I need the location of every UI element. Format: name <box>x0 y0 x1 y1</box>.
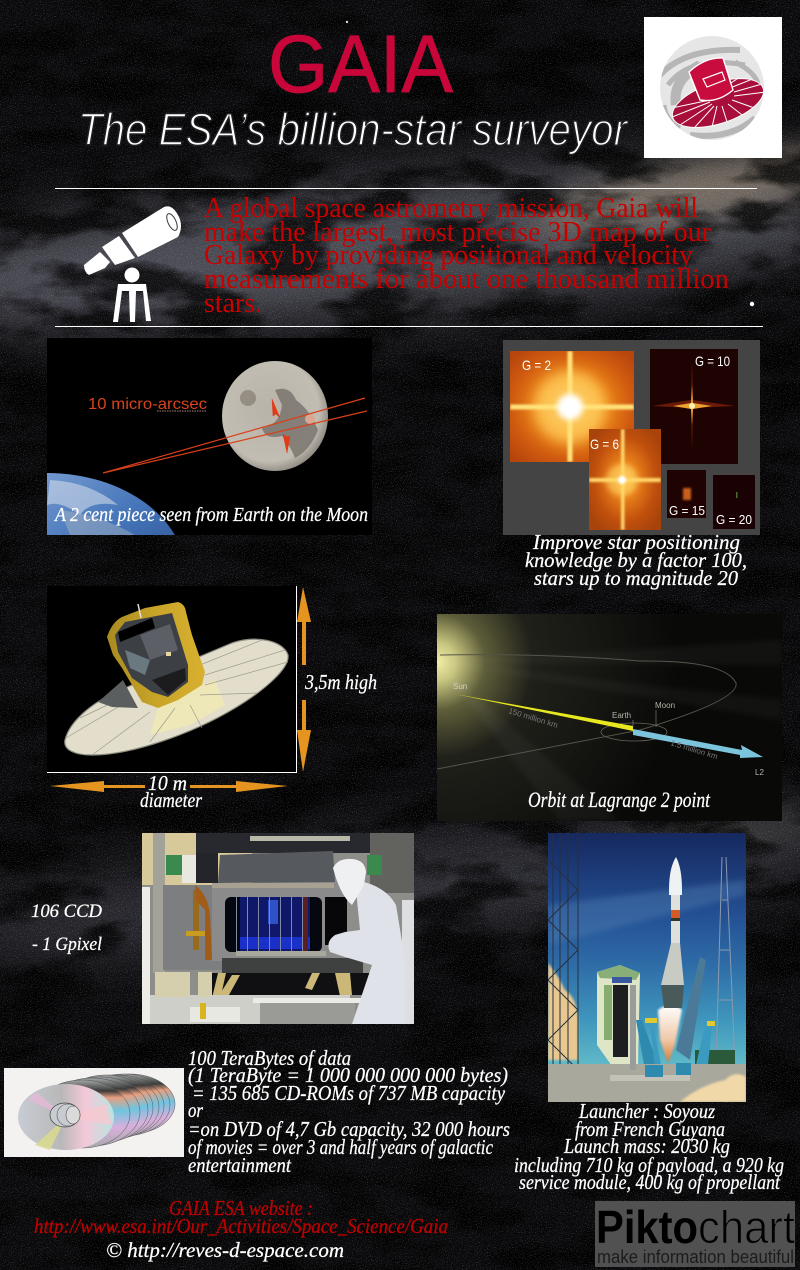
moon <box>222 361 328 471</box>
arrow: height <box>297 587 311 772</box>
G=6: G = 6 <box>590 436 619 452</box>
service tower <box>597 965 640 1066</box>
main plate <box>163 885 223 970</box>
text: data volume: (1 TeraByte = 1 000 000 000 000 bytes) <box>188 1063 508 1087</box>
text: data volume: =on DVD of 4,7 Gb capacity, 32 000 hours <box>188 1117 510 1141</box>
intro text: Galaxy by providing positional and velocity <box>204 239 693 271</box>
intro text <box>204 192 729 319</box>
ground <box>548 985 746 1102</box>
divider line top <box>55 188 757 189</box>
gold shell <box>107 602 205 708</box>
panel: lagrange orbit image <box>437 614 782 821</box>
footer: website links: © http://reves-d-espace.com <box>106 1238 344 1262</box>
panel: earth moon angle image <box>47 338 372 535</box>
G=15: G = 15 <box>669 503 705 518</box>
thermal cover <box>218 851 335 883</box>
trees <box>695 1050 735 1065</box>
arrow: diameter <box>50 781 288 792</box>
sunshield <box>65 639 288 755</box>
G=10 <box>650 349 738 464</box>
instrument frame <box>212 888 223 961</box>
G=20 <box>713 475 755 529</box>
panel: star magnitude images <box>503 340 760 535</box>
caption: star positioning: knowledge by a factor 100, <box>525 548 747 572</box>
G=20: G = 20 <box>716 512 752 527</box>
caption: star positioning: Improve star positioning <box>532 530 740 554</box>
panel: ccd focal plane photo <box>142 833 414 1024</box>
rocket <box>661 857 684 1008</box>
intro text: measurements for about one thousand million <box>204 263 729 295</box>
flame <box>658 1005 682 1063</box>
intro text: make the largest, most precise 3D map of our <box>204 216 711 248</box>
smoke left <box>548 963 578 1060</box>
launch tower <box>548 833 579 1064</box>
text: data volume: 100 TeraBytes of data <box>188 1046 351 1070</box>
technician <box>328 859 414 1024</box>
title: GAIA <box>268 19 453 110</box>
panel: lagrange orbit image: Sun <box>453 682 467 691</box>
panel: cd stack photo <box>4 1068 184 1157</box>
logo: piktochart watermark: Pikto <box>596 1201 698 1253</box>
text: launcher details <box>514 1099 784 1194</box>
label: 106 CCD <box>31 901 102 955</box>
logo: piktochart watermark: chart <box>698 1201 795 1253</box>
G=2 <box>510 351 634 462</box>
caption: star positioning <box>525 530 747 590</box>
icon: telescope <box>84 206 181 322</box>
G=6 <box>589 429 661 530</box>
caption: Orbit at Lagrange 2 point <box>528 787 711 812</box>
panel: gaia spacecraft image <box>47 586 297 773</box>
text: launcher details: Launch mass: 2030 kg <box>563 1134 730 1158</box>
caption: star positioning: stars up to magnitude 20 <box>534 566 738 590</box>
label: 106 CCD: 106 CCD <box>31 901 102 922</box>
footer: website links <box>34 1196 448 1262</box>
footer: website links: http://www.esa.int/Our_Activities/Space_Science/Gaia <box>34 1214 448 1238</box>
text: data volume: of movies = over 3 and half years of galactic <box>188 1135 494 1159</box>
text: data volume <box>188 1046 510 1177</box>
label: 10 m diameter: 10 m <box>148 771 187 795</box>
text: data volume: or <box>188 1098 204 1122</box>
gantries <box>636 957 715 1070</box>
label: 10 micro-arcsec: 10 micro-arcsec <box>88 396 207 413</box>
divider line bottom <box>55 326 763 327</box>
support legs <box>212 973 352 996</box>
label: 10 m diameter: diameter <box>140 788 203 812</box>
G=2: G = 2 <box>522 357 551 373</box>
footer: website links: GAIA ESA website : <box>169 1196 313 1220</box>
panel: lagrange orbit image: L2 <box>755 768 764 777</box>
lower bench <box>150 995 350 1024</box>
icon: gaia mission logo <box>644 17 782 158</box>
G=15 <box>667 470 706 518</box>
panel: lagrange orbit image: 150 million km <box>507 706 559 730</box>
caption: A 2 cent piece seen from Earth on the Moon <box>53 504 368 526</box>
text: data volume: entertainment <box>188 1153 292 1177</box>
earth <box>47 473 175 535</box>
panel: lagrange orbit image: Earth <box>612 711 631 720</box>
text: launcher details: Launcher : Soyouz <box>578 1099 715 1123</box>
wall and rack <box>142 833 414 1024</box>
subtitle: The ESA’s billion-star surveyor <box>78 104 629 155</box>
logo: piktochart watermark <box>595 1201 795 1267</box>
mast right <box>716 857 735 1063</box>
text: data volume: = 135 685 CD-ROMs of 737 MB capacity <box>192 1081 506 1105</box>
intro text: A global space astrometry mission, Gaia will <box>204 192 698 224</box>
panel: lagrange orbit image: 1.5 million km <box>669 738 719 761</box>
label: 3,5m high: 3,5m high <box>304 670 377 694</box>
label: 10 m diameter <box>140 771 203 812</box>
panel: lagrange orbit image: Moon <box>655 701 675 710</box>
text: launcher details: from French Guyana <box>575 1117 725 1141</box>
panel: soyuz launcher illustration <box>548 833 746 1102</box>
intro text: stars. <box>204 287 262 319</box>
G=10: G = 10 <box>695 353 730 369</box>
label: 106 CCD: - 1 Gpixel <box>32 934 102 955</box>
